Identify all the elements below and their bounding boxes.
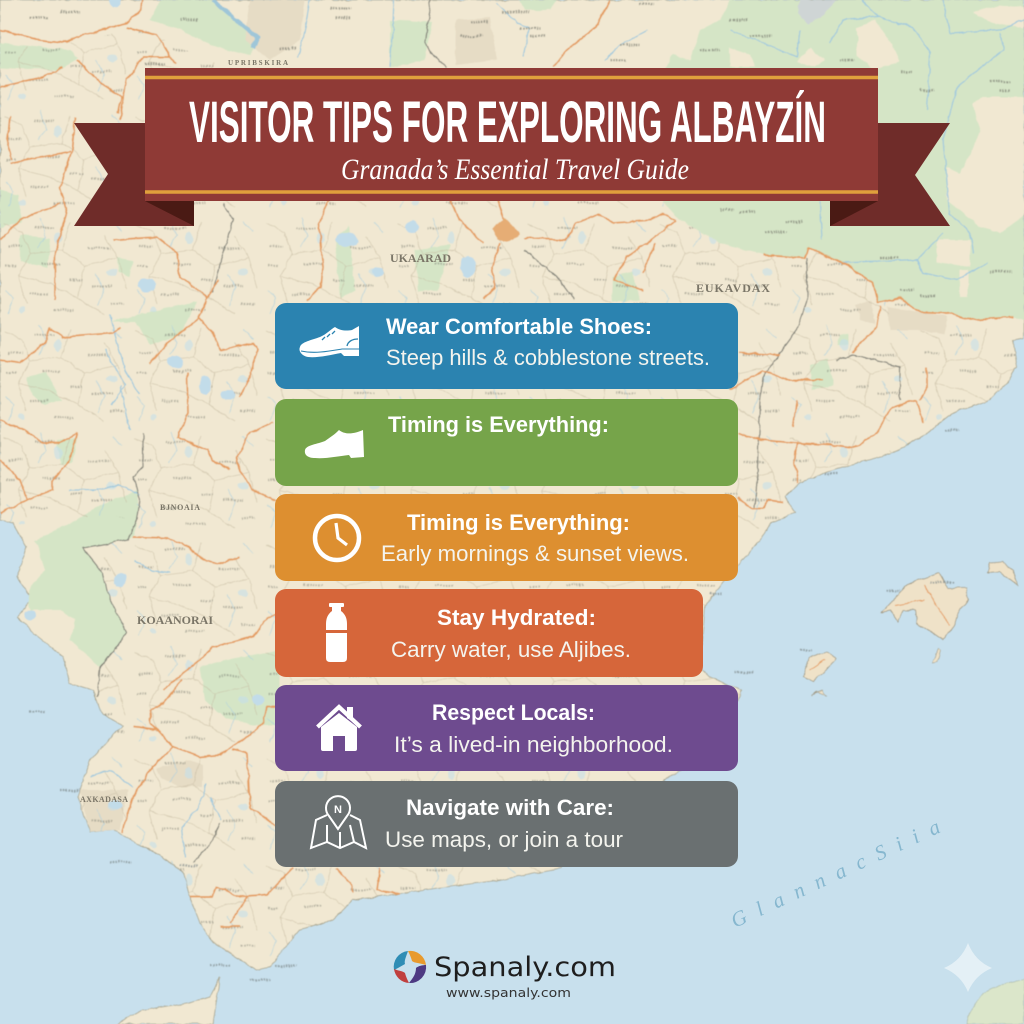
icon: map with pin: N xyxy=(334,804,342,816)
thin grey roads xyxy=(83,0,900,863)
southeast island xyxy=(967,980,1024,1024)
right ribbon tail xyxy=(830,123,950,226)
heading: Navigate with Care: xyxy=(406,795,614,820)
card background xyxy=(275,685,738,771)
card background xyxy=(275,781,738,867)
card: wear comfortable shoes xyxy=(275,303,738,389)
body: Carry water, use Aljibes. xyxy=(391,637,631,662)
Mallorca island xyxy=(882,573,968,640)
icon: map with pin xyxy=(311,796,366,848)
left ribbon tail xyxy=(74,123,194,226)
tan zones xyxy=(80,0,947,832)
island roads xyxy=(810,585,950,670)
brand name: Spanaly.com xyxy=(434,952,616,983)
subtitle: Granada’s Essential Travel Guide xyxy=(341,153,689,186)
grey lake xyxy=(798,0,836,24)
icon: shoe xyxy=(305,430,364,458)
cream patches xyxy=(660,0,1024,297)
heading: Timing is Everything: xyxy=(388,412,609,437)
body: It’s a lived-in neighborhood. xyxy=(394,732,673,757)
website url: www.spanaly.com xyxy=(446,985,571,1000)
coast labels xyxy=(30,430,959,980)
heading: Wear Comfortable Shoes: xyxy=(386,314,652,339)
heading: Respect Locals: xyxy=(432,700,595,725)
heading: Timing is Everything: xyxy=(407,510,630,535)
lakes xyxy=(24,0,476,809)
logo xyxy=(394,951,616,1000)
card background xyxy=(275,399,738,486)
logo mark xyxy=(394,951,426,983)
rivers xyxy=(213,0,257,48)
banner xyxy=(74,68,950,226)
card background xyxy=(275,589,703,677)
body: Use maps, or join a tour xyxy=(385,827,623,852)
body: Steep hills & cobblestone streets. xyxy=(386,345,710,370)
icon: clock xyxy=(315,516,359,560)
garbled map labels: EUKAVDAX xyxy=(696,281,770,295)
Menorca island xyxy=(987,562,1017,585)
small islets xyxy=(812,648,940,695)
left ribbon fold xyxy=(145,201,194,226)
card background xyxy=(275,303,738,389)
west and top green areas xyxy=(0,0,848,725)
card: stay hydrated xyxy=(275,589,703,677)
right ribbon fold xyxy=(830,201,878,226)
icon: shoe xyxy=(299,326,359,357)
garbled map labels: BJNOAIA xyxy=(160,503,200,512)
sea label: GlannacSiia xyxy=(727,814,944,933)
card background xyxy=(275,494,738,581)
heading: Stay Hydrated: xyxy=(437,605,596,630)
north green region xyxy=(650,0,1024,320)
garbled map labels: AXKADASA xyxy=(80,795,128,804)
icon: house xyxy=(318,707,360,751)
garbled map labels: UPRIBSKIRA xyxy=(228,59,288,67)
Ibiza island xyxy=(803,652,836,682)
garbled map labels: KOAANORAI xyxy=(137,613,213,627)
southern land xyxy=(117,977,220,1024)
banner body xyxy=(145,68,878,201)
sparkle xyxy=(944,943,992,992)
banner stripes xyxy=(145,78,878,192)
body: Early mornings & sunset views. xyxy=(381,541,689,566)
icon: bottle xyxy=(326,603,347,662)
card: timing (shoe) xyxy=(275,399,738,486)
tiny sparse labels xyxy=(30,4,1012,296)
card: respect locals xyxy=(275,685,738,771)
garbled map labels xyxy=(80,59,770,804)
card: timing (clock) xyxy=(275,494,738,581)
card: navigate with care xyxy=(275,781,738,867)
city xyxy=(492,218,520,242)
garbled map labels: UKAARAD xyxy=(390,251,451,265)
